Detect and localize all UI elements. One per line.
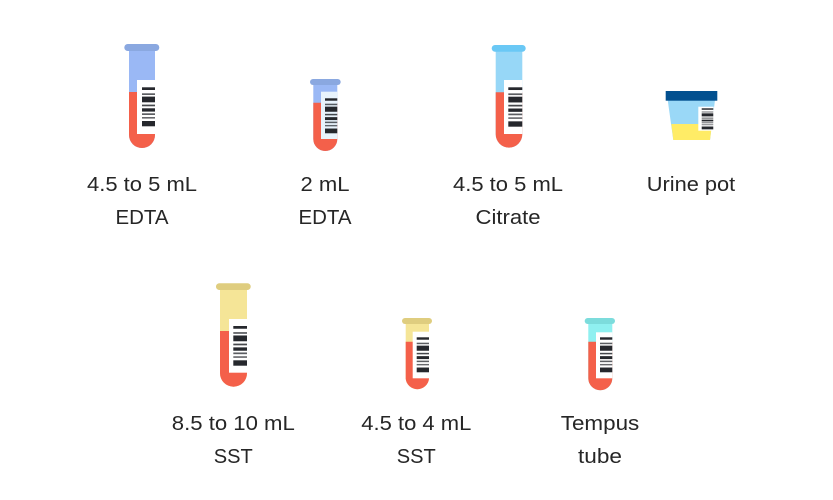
label: 4.5 to 5 mL Citrate: 4.5 to 5 mL <box>453 174 563 196</box>
tube: 4.5 to 5 mL Citrate <box>492 45 526 148</box>
label: 2 mL EDTA <box>298 174 352 229</box>
label: 4.5 to 4 mL SST: SST <box>397 446 436 468</box>
label: Tempus tube <box>561 413 639 468</box>
label: 4.5 to 5 mL EDTA: 4.5 to 5 mL <box>87 174 197 196</box>
tube: 2 mL EDTA <box>310 79 341 151</box>
label: 2 mL EDTA: 2 mL <box>300 174 350 196</box>
icon: urine pot <box>666 91 717 140</box>
tube: Tempus tube <box>585 318 615 390</box>
label: Urine pot: Urine pot <box>647 174 736 196</box>
label: Tempus tube: Tempus <box>561 413 639 435</box>
label: Tempus tube: tube <box>578 446 622 468</box>
label: 8.5 to 10 mL SST: SST <box>214 446 253 468</box>
label: 4.5 to 4 mL SST: 4.5 to 4 mL <box>361 413 471 435</box>
label: 4.5 to 5 mL EDTA <box>87 174 197 229</box>
label: 4.5 to 5 mL Citrate <box>453 174 563 229</box>
label: 4.5 to 5 mL Citrate: Citrate <box>476 207 540 229</box>
tube: 4.5 to 4 mL SST <box>402 318 432 389</box>
tube: 8.5 to 10 mL SST <box>216 283 251 387</box>
label: 4.5 to 4 mL SST <box>361 413 471 468</box>
label: 2 mL EDTA: EDTA <box>298 207 352 229</box>
tube: 4.5 to 5 mL EDTA <box>124 44 159 148</box>
label: 8.5 to 10 mL SST: 8.5 to 10 mL <box>172 413 295 435</box>
label: 8.5 to 10 mL SST <box>172 413 295 468</box>
label: 4.5 to 5 mL EDTA: EDTA <box>116 207 169 229</box>
